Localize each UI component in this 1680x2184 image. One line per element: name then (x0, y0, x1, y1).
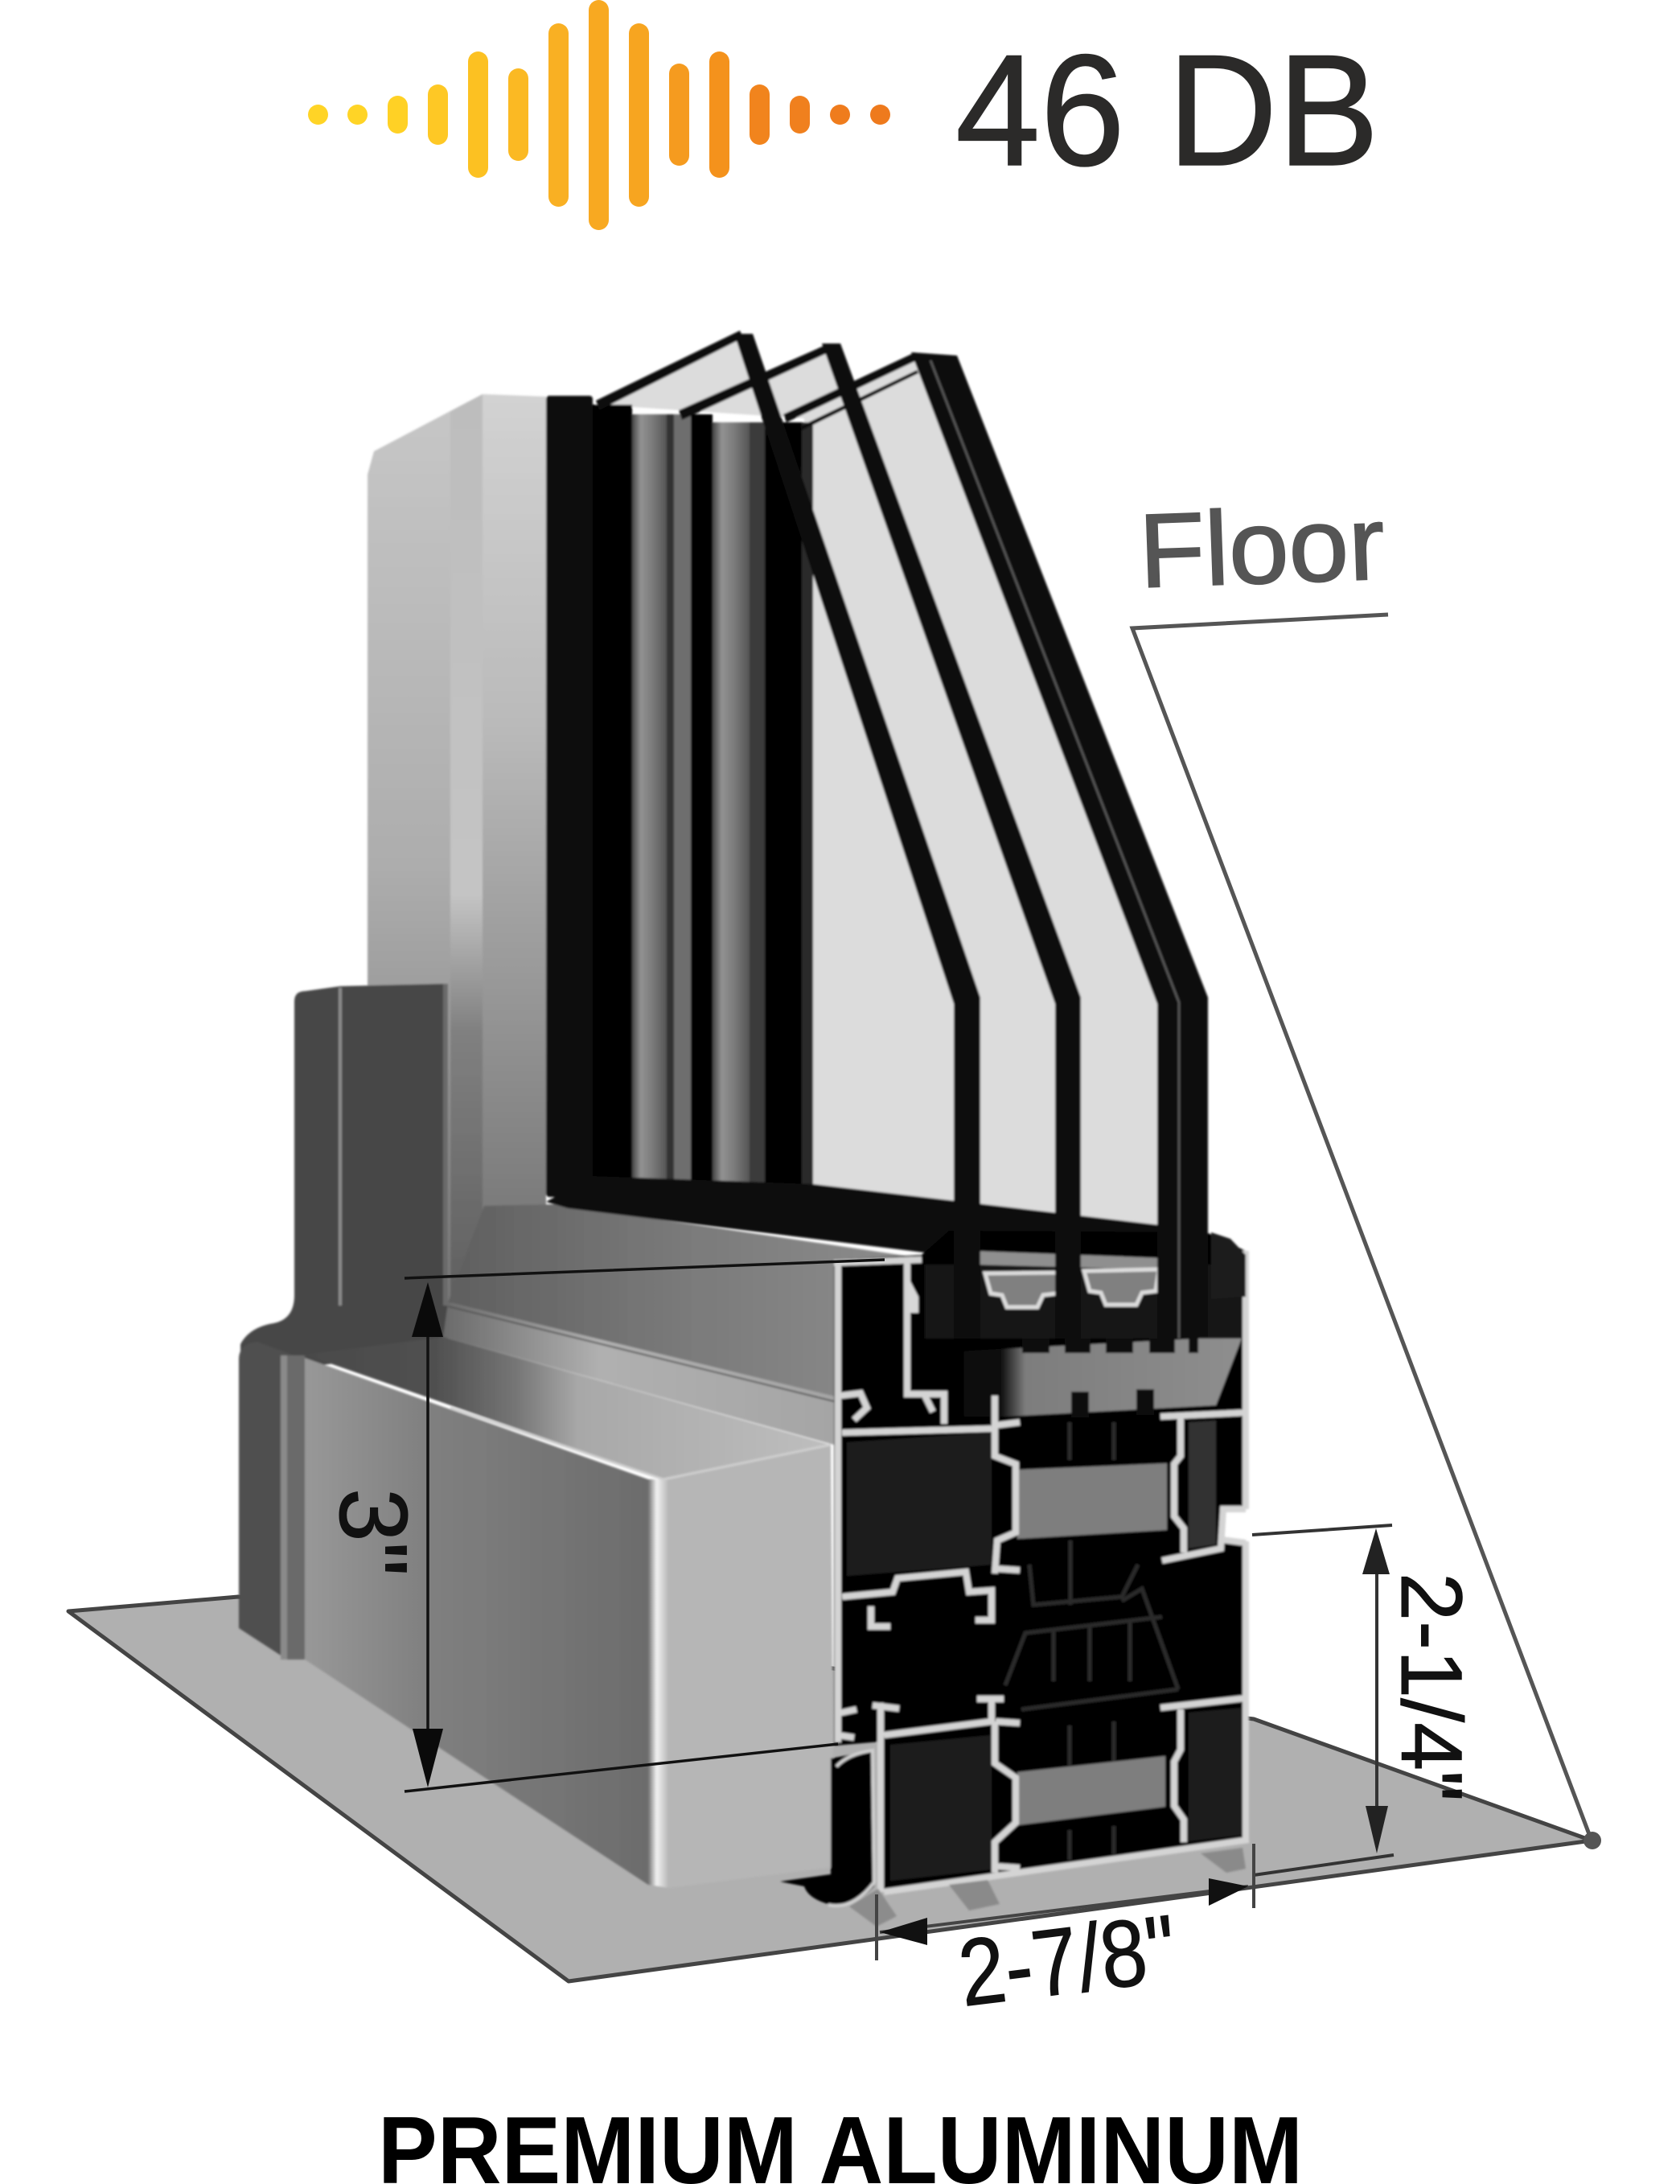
glass pane frames (596, 331, 1208, 1339)
sill faces (443, 1204, 922, 1445)
floor feet (849, 1848, 1246, 1927)
thermal-break cell outlines (1005, 1422, 1178, 1860)
dimension: 3 inch height (319, 1260, 885, 1791)
dark inner cells (847, 1421, 1243, 1881)
drainage channel (780, 1750, 874, 1906)
dimension: 2-7/8 inch (877, 1844, 1254, 2026)
pane highlight line (930, 360, 1179, 1339)
wedge under glass (941, 1336, 1243, 1417)
floor callout (1132, 483, 1601, 1849)
dimension: 2-1/4 inch: 2-1/4" (1383, 1573, 1481, 1802)
spacer bars (985, 1269, 1159, 1307)
icon: sound waveform (308, 0, 890, 230)
back dark block (239, 984, 448, 1660)
light aluminium walls (834, 1251, 1249, 1892)
heading: decibel rating: 46 DB (955, 22, 1379, 199)
right gasket (1211, 1232, 1246, 1299)
grey thermal bands (1017, 1463, 1167, 1825)
sill gasket (546, 1176, 1208, 1267)
front sash block (305, 1337, 834, 1888)
floor callout: Floor (1137, 483, 1386, 610)
aluminium profile cross-section (780, 1231, 1249, 1927)
vertical mullions (546, 396, 813, 1197)
section black fill (834, 1231, 1246, 1892)
light wedge tab (909, 1278, 918, 1313)
glazing base bar (925, 1265, 1243, 1339)
window frame illustration (239, 331, 1249, 1927)
wall frame panel (368, 394, 546, 1319)
dimension: 3 inch height: 3" (319, 1488, 427, 1576)
glass background (596, 334, 1208, 1255)
J-shaped drip edge (828, 1750, 874, 1906)
dimension: 2-7/8 inch: 2-7/8" (953, 1895, 1181, 2026)
glass seat blocks (1022, 1339, 1198, 1417)
dimension: 2-1/4 inch (1252, 1525, 1481, 1875)
floor plate (68, 1597, 1592, 1981)
